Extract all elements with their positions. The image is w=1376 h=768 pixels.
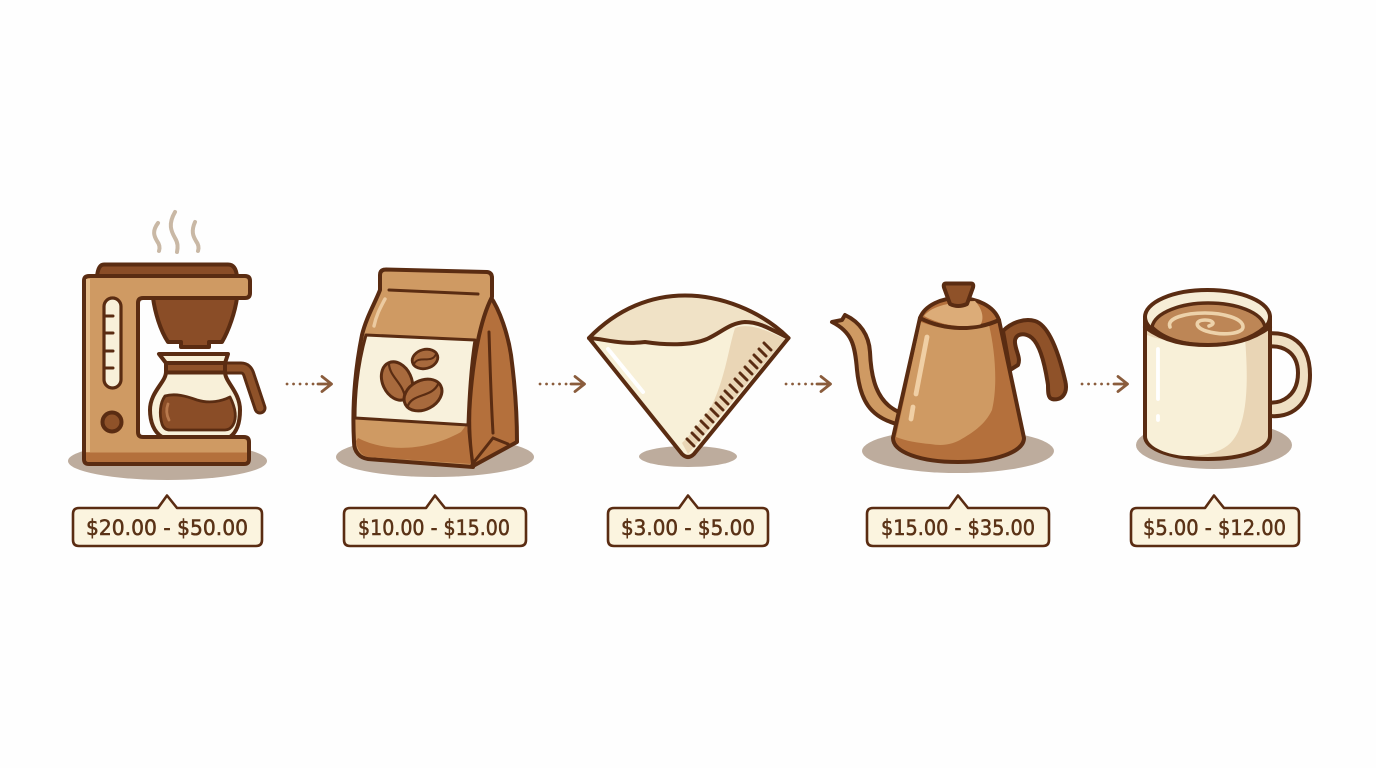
water gauge [104,298,121,388]
carafe band [166,363,225,372]
icon shadow: mug [1136,421,1292,469]
bag label [355,335,475,425]
carafe coffee highlight [167,404,169,420]
mug body [1145,317,1270,459]
coffee in carafe [160,395,235,430]
gusset folds [474,332,508,462]
price tag 1: $20.00 - $50.00 [86,516,248,540]
filter crimp ticks [687,343,771,446]
bag seal line [389,290,478,294]
lid highlight [924,301,982,326]
kettle handle [1003,320,1066,399]
mug highlights [1156,349,1160,420]
coffee surface [1152,303,1265,345]
item: coffee bag [336,270,534,477]
price tag 2 [344,496,526,546]
price tag 4 [867,496,1049,546]
mug body light area [1147,335,1247,456]
carafe collar [159,354,228,363]
item: coffee maker [68,212,267,480]
icon shadow: kettle [862,429,1054,473]
kettle knob [944,284,973,306]
coffee beans [375,346,447,417]
bag front [353,270,492,467]
lid outline [920,318,999,328]
icon shadow: filter [639,446,737,467]
filter cone [589,322,788,457]
kettle lid [920,298,999,328]
item: coffee mug [1136,290,1310,469]
filter back rim [589,296,788,345]
coffee maker body [84,276,250,464]
side highlight [86,279,90,452]
mug rim front [1145,327,1270,345]
kettle body [893,318,1024,462]
item: gooseneck kettle [832,284,1066,473]
arrow 4 [1082,376,1128,392]
kettle highlights [911,337,927,419]
mug handle [1264,333,1310,416]
carafe handle [222,368,260,408]
price tag 4: $15.00 - $35.00 [881,516,1035,540]
kettle body light area [896,322,995,445]
icon shadow: coffee maker [68,442,267,480]
bag gusset [467,296,517,466]
power button [102,412,122,432]
carafe glass [150,372,240,437]
arrow 1 [287,376,332,392]
filter crimp shading [682,326,785,454]
arrow 3 [786,376,830,392]
item: paper filter [589,296,788,467]
price tag 1 [73,496,262,546]
price tag 5: $5.00 - $12.00 [1143,516,1286,540]
filter highlight [608,349,643,392]
filter basket [153,298,237,347]
price tag 2: $10.00 - $15.00 [358,516,510,540]
mug inner wall [1145,290,1270,344]
kettle spout [832,315,899,424]
price tag 5 [1131,496,1299,546]
price tag 3: $3.00 - $5.00 [621,516,755,540]
bag highlight [374,299,385,326]
price tag 3 [608,496,768,546]
base shading [86,452,247,462]
latte swirl [1169,313,1243,334]
arrow 2 [540,376,584,392]
bag lower shading [356,424,471,464]
coffee maker lid [97,264,237,277]
filter outline [589,322,788,457]
icon shadow: bag [336,437,534,477]
steam [154,212,199,252]
